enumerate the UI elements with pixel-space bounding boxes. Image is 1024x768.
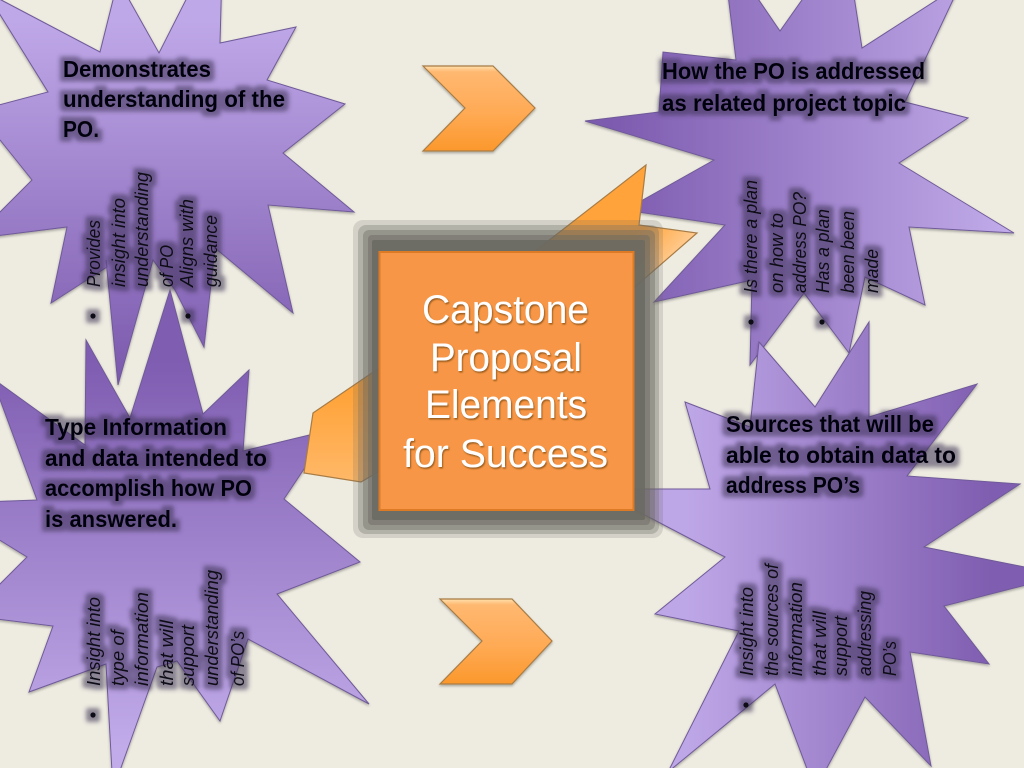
panel: how the PO is addressed bbox=[585, 0, 1014, 365]
heading bbox=[662, 58, 925, 116]
title: Capstone bbox=[422, 288, 589, 332]
rotated bullet text bbox=[83, 171, 221, 319]
heading: as related project topic bbox=[662, 90, 906, 116]
heading: able to obtain data to bbox=[726, 442, 956, 468]
centre box bbox=[380, 252, 634, 510]
heading: Type Information bbox=[45, 414, 227, 440]
heading bbox=[63, 56, 285, 142]
heading: accomplish how PO bbox=[45, 475, 252, 501]
heading: is answered. bbox=[45, 506, 177, 532]
rotated bullet text: information bbox=[785, 582, 806, 676]
arrow: top-right orange shape behind centre box bbox=[530, 165, 697, 300]
heading: and data intended to bbox=[45, 445, 267, 471]
heading: Sources that will be bbox=[726, 411, 934, 437]
rotated bullet text: Insight into bbox=[736, 587, 757, 676]
rotated bullet text: understanding bbox=[201, 569, 222, 686]
heading: How the PO is addressed bbox=[662, 58, 925, 84]
rotated bullet text: of PO bbox=[156, 245, 177, 287]
heading bbox=[726, 411, 956, 498]
rotated bullet text: type of bbox=[107, 628, 128, 686]
rotated bullet text: made bbox=[861, 249, 882, 293]
starburst shape bbox=[585, 0, 1014, 365]
rotated bullet text: support bbox=[830, 615, 851, 676]
heading: Demonstrates bbox=[63, 56, 211, 82]
rotated bullet text bbox=[83, 569, 248, 718]
heading: PO. bbox=[63, 116, 99, 142]
heading: understanding of the bbox=[63, 86, 285, 112]
heading: address PO’s bbox=[726, 472, 860, 498]
title: Elements bbox=[425, 383, 587, 427]
starburst shape bbox=[0, 0, 354, 385]
rotated bullet text: Is there a plan bbox=[740, 180, 761, 293]
rotated bullet text: address PO? bbox=[789, 191, 810, 293]
centre box shadow bbox=[353, 220, 663, 538]
rotated bullet text: Provides bbox=[83, 220, 104, 287]
heading bbox=[45, 414, 267, 532]
arrow: bottom chevron bbox=[440, 599, 552, 684]
rotated bullet text: support bbox=[177, 624, 198, 686]
rotated bullet text: the sources of bbox=[761, 562, 782, 676]
rotated bullet text: Insight into bbox=[83, 597, 104, 686]
rotated bullet text: of PO’s bbox=[227, 631, 248, 686]
rotated bullet text: been been bbox=[837, 211, 858, 293]
rotated bullet text bbox=[736, 562, 900, 708]
rotated bullet text: PO’s bbox=[879, 641, 900, 676]
rotated bullet text: insight into bbox=[108, 198, 129, 287]
rotated bullet text: that will bbox=[809, 610, 830, 676]
rotated bullet text: on how to bbox=[766, 213, 787, 293]
title bbox=[403, 288, 608, 476]
rotated bullet text: that will bbox=[156, 619, 177, 686]
rotated bullet text: Has a plan bbox=[812, 209, 833, 293]
panel: demonstrates understanding of the PO bbox=[0, 0, 354, 385]
rotated bullet text: Aligns with bbox=[176, 199, 197, 288]
arrow: top chevron bbox=[423, 66, 535, 151]
panel: type information and data bbox=[0, 290, 369, 768]
rotated bullet text: information bbox=[131, 592, 152, 686]
starburst shape bbox=[0, 290, 369, 768]
rotated bullet text: understanding bbox=[131, 171, 152, 287]
rotated bullet text bbox=[740, 180, 882, 325]
panel: sources of data bbox=[620, 322, 1024, 768]
rotated bullet text: addressing bbox=[854, 590, 875, 676]
starburst shape bbox=[620, 322, 1024, 768]
rotated bullet text: guidance bbox=[200, 215, 221, 287]
arrow: left orange shape behind centre box bbox=[304, 364, 385, 482]
title: for Success bbox=[403, 432, 608, 476]
title: Proposal bbox=[430, 336, 582, 380]
